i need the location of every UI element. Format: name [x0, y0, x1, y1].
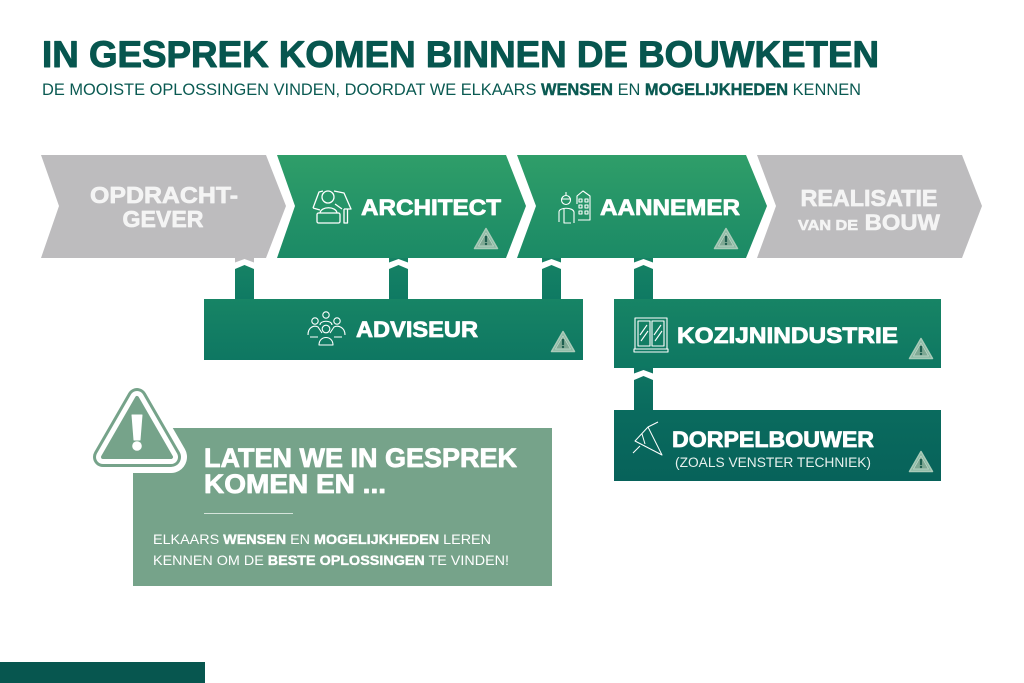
callout heading: KOMEN EN ... — [204, 469, 386, 499]
icon: warning dorpelbouwer — [910, 452, 932, 472]
icon: warning aannemer — [714, 228, 738, 248]
label: dorpelbouwer: DORPELBOUWER — [672, 427, 874, 452]
chevron: architect — [277, 155, 526, 258]
connector: dorpelbouwer to kozijnindustrie — [634, 368, 653, 410]
chevron: aannemer — [517, 155, 767, 258]
icon: group of people — [308, 312, 345, 345]
callout body text: ELKAARS WENSEN EN MOGELIJKHEDEN LEREN — [153, 531, 491, 547]
callout panel — [103, 398, 552, 586]
chevron: opdrachtgever: GEVER — [122, 206, 204, 232]
icon: warning kozijnindustrie — [910, 338, 932, 358]
connector: adviseur to opdrachtgever — [235, 258, 254, 299]
panel: kozijnindustrie — [614, 299, 941, 368]
panel: dorpelbouwer — [614, 410, 941, 481]
callout body text: KENNEN OM DE BESTE OPLOSSINGEN TE VINDEN! — [153, 552, 509, 568]
chevron: realisatie van de bouw: VAN DE BOUW — [798, 210, 940, 235]
label: kozijnindustrie: KOZIJNINDUSTRIE — [677, 323, 898, 348]
label: architect: ARCHITECT — [361, 195, 501, 220]
icon: large warning triangle — [103, 398, 171, 457]
label: zoals venster techniek: (ZOALS VENSTER TECHNIEK) — [675, 455, 871, 470]
panel: adviseur — [204, 299, 583, 360]
connector: adviseur to aannemer — [542, 258, 561, 299]
chevron: realisatie van de bouw: REALISATIE — [800, 185, 938, 211]
footer bar — [0, 662, 205, 683]
connector: kozijnindustrie to aannemer — [634, 258, 653, 299]
icon: sill profile — [633, 422, 662, 455]
icon: warning architect — [474, 228, 498, 248]
callout heading — [204, 443, 517, 499]
callout body text — [153, 531, 509, 568]
connector: adviseur to architect — [389, 258, 408, 299]
label: aannemer: AANNEMER — [600, 195, 740, 220]
label: adviseur: ADVISEUR — [356, 317, 478, 342]
icon: architect at drawing table — [313, 191, 351, 223]
icon: contractor and building — [559, 191, 590, 223]
icon: window frame — [634, 318, 668, 352]
chevron: realisatie van de bouw — [757, 155, 982, 258]
chevron: opdrachtgever: OPDRACHT- — [90, 182, 238, 208]
subtitle: DE MOOISTE OPLOSSINGEN VINDEN, DOORDAT WE ELKAARS WENSEN EN MOGELIJKHEDEN KENNEN — [42, 80, 861, 99]
chevron: opdrachtgever — [41, 155, 286, 258]
callout heading: LATEN WE IN GESPREK — [204, 443, 517, 473]
title: IN GESPREK KOMEN BINNEN DE BOUWKETEN — [42, 34, 879, 75]
icon: warning adviseur — [552, 332, 574, 352]
